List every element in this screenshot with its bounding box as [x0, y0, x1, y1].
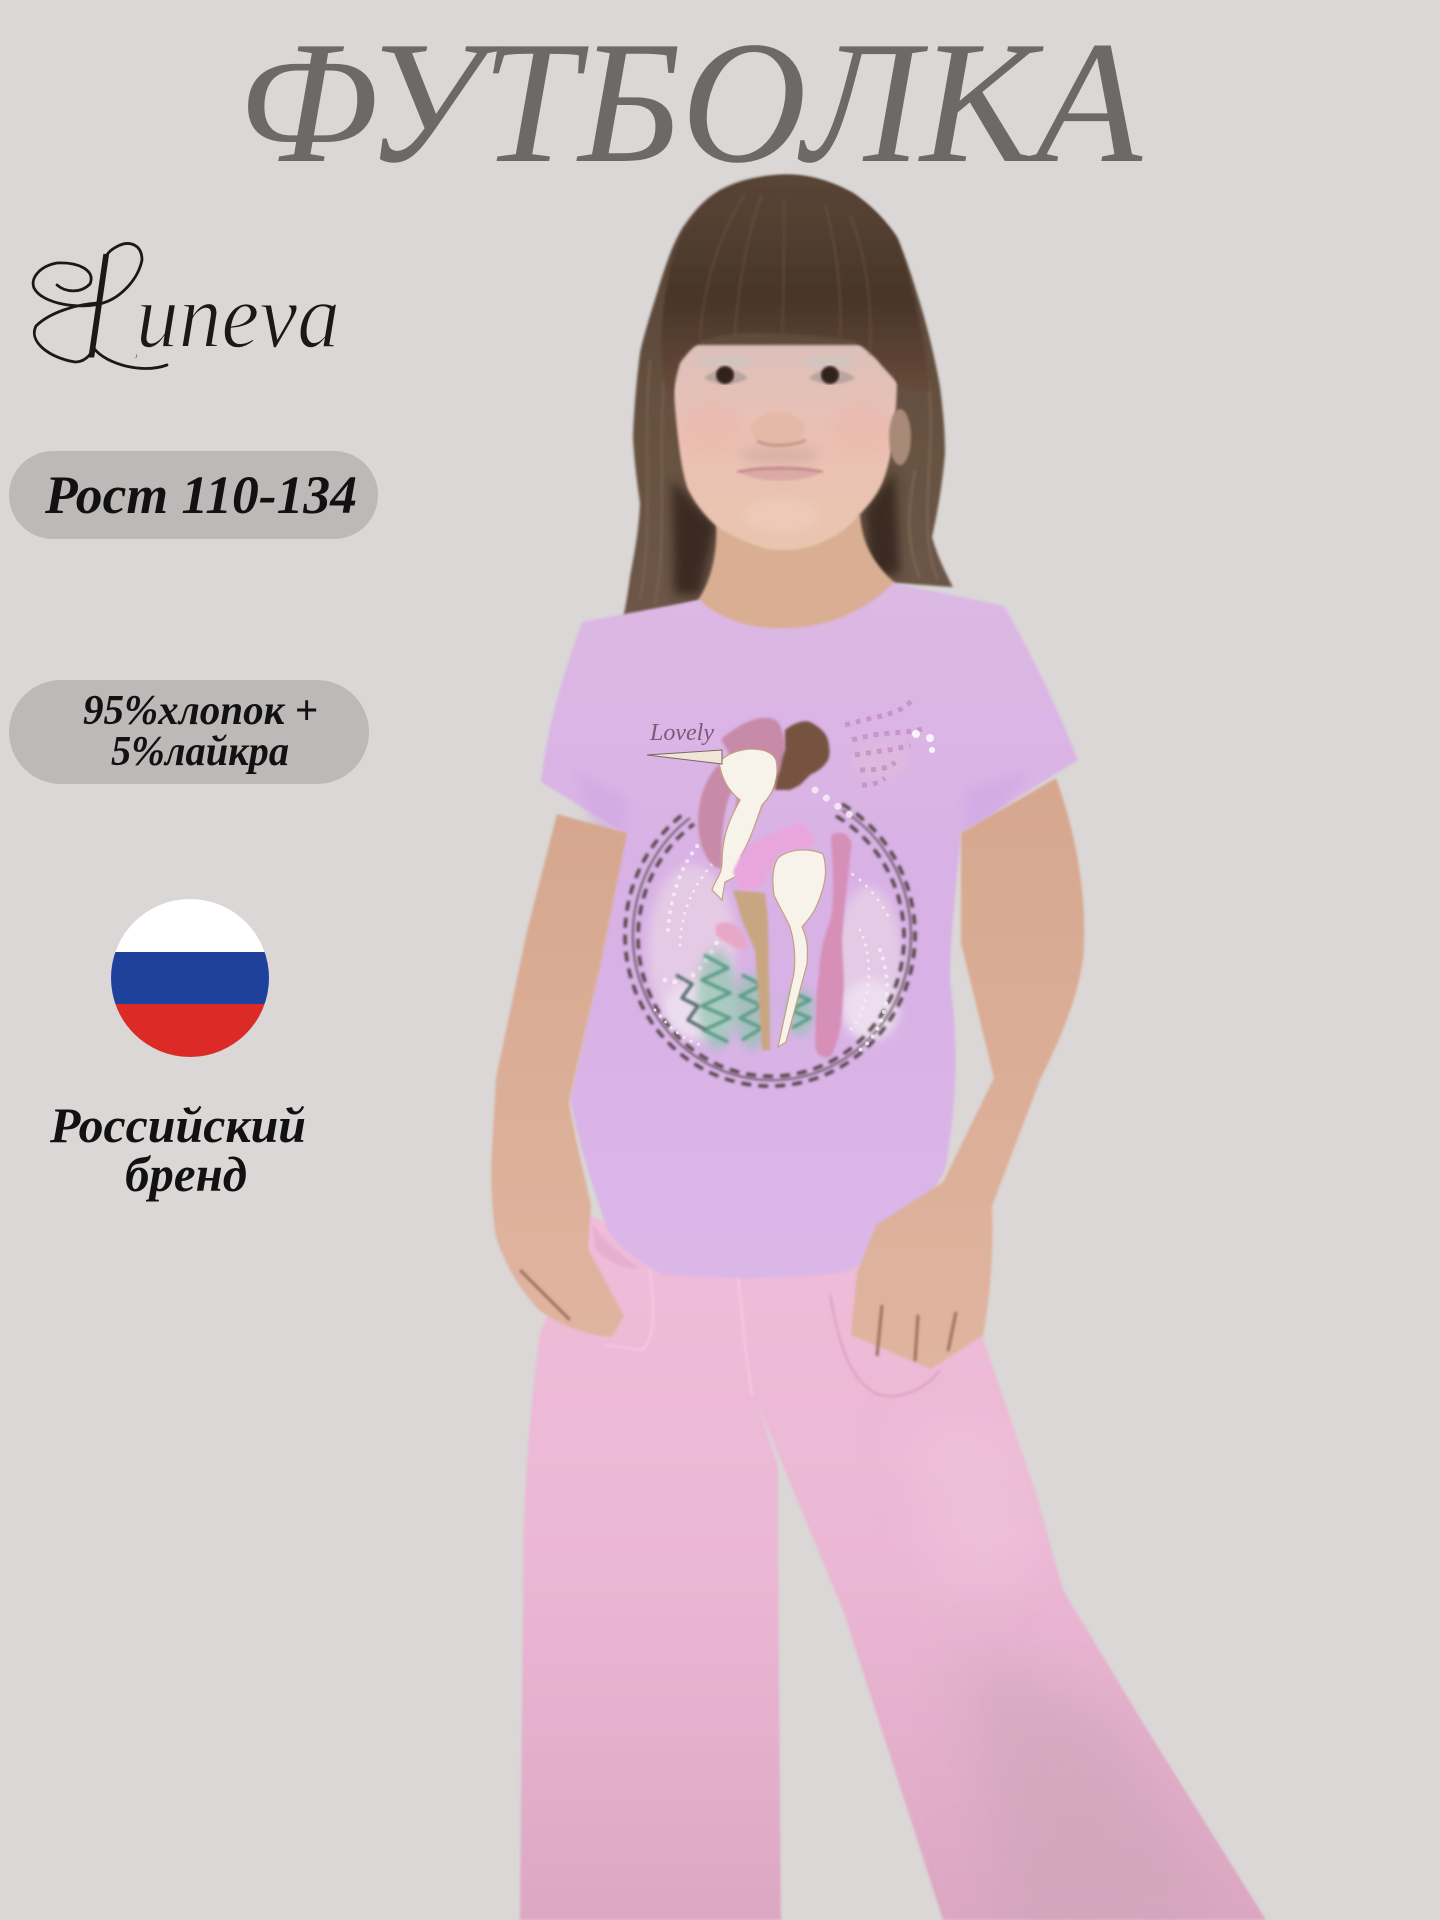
wreath — [625, 804, 915, 1086]
left arm — [491, 814, 627, 1337]
pill: fabric composition: 5%лайкра — [111, 729, 289, 775]
pill: fabric composition — [9, 680, 369, 784]
print wing dots — [845, 700, 925, 785]
mouth — [737, 466, 823, 481]
eyes — [699, 356, 856, 384]
print white beads — [912, 730, 935, 753]
print mane — [698, 718, 784, 868]
t-shirt — [541, 583, 1078, 1278]
title: ФУТБОЛКА — [238, 5, 1143, 199]
icon: russian flag — [111, 899, 269, 1057]
print horn — [647, 750, 722, 764]
print sparkle dots — [655, 790, 890, 1050]
print unicorn hind — [773, 850, 826, 1047]
shirt print: unicorn and wreath — [625, 700, 935, 1086]
print rider hair — [775, 721, 830, 790]
pill: height: Рост 110-134 — [44, 465, 357, 525]
print unicorn front — [712, 749, 777, 900]
face — [673, 345, 897, 550]
hair back — [623, 175, 953, 618]
hair strands — [640, 360, 938, 605]
neck — [698, 515, 895, 632]
bangs — [662, 175, 930, 400]
right arm — [851, 778, 1084, 1369]
photo: girl — [491, 175, 1266, 1920]
logo: Luneva: uneva — [136, 265, 340, 367]
brand caption: бренд — [125, 1146, 247, 1202]
fingers — [520, 1270, 956, 1361]
pill: height — [9, 451, 378, 539]
print lettering: Lovely — [649, 720, 714, 746]
print pink hoof — [716, 922, 748, 949]
trousers — [520, 1215, 1266, 1920]
pill: fabric composition: 95%хлопок + — [83, 688, 318, 734]
print plants — [676, 950, 814, 1050]
print glow — [648, 740, 910, 1043]
print rider dress — [733, 822, 815, 890]
brand caption: Российский — [49, 1097, 306, 1153]
print rider legs — [733, 890, 770, 1050]
hair shadow — [672, 470, 900, 595]
nose — [751, 412, 806, 448]
print tail — [815, 833, 852, 1057]
logo: Luneva: L — [72, 210, 152, 400]
logo: Luneva — [33, 210, 340, 400]
ear — [889, 409, 911, 465]
brand caption — [49, 1097, 306, 1202]
bangs strands — [700, 195, 870, 355]
